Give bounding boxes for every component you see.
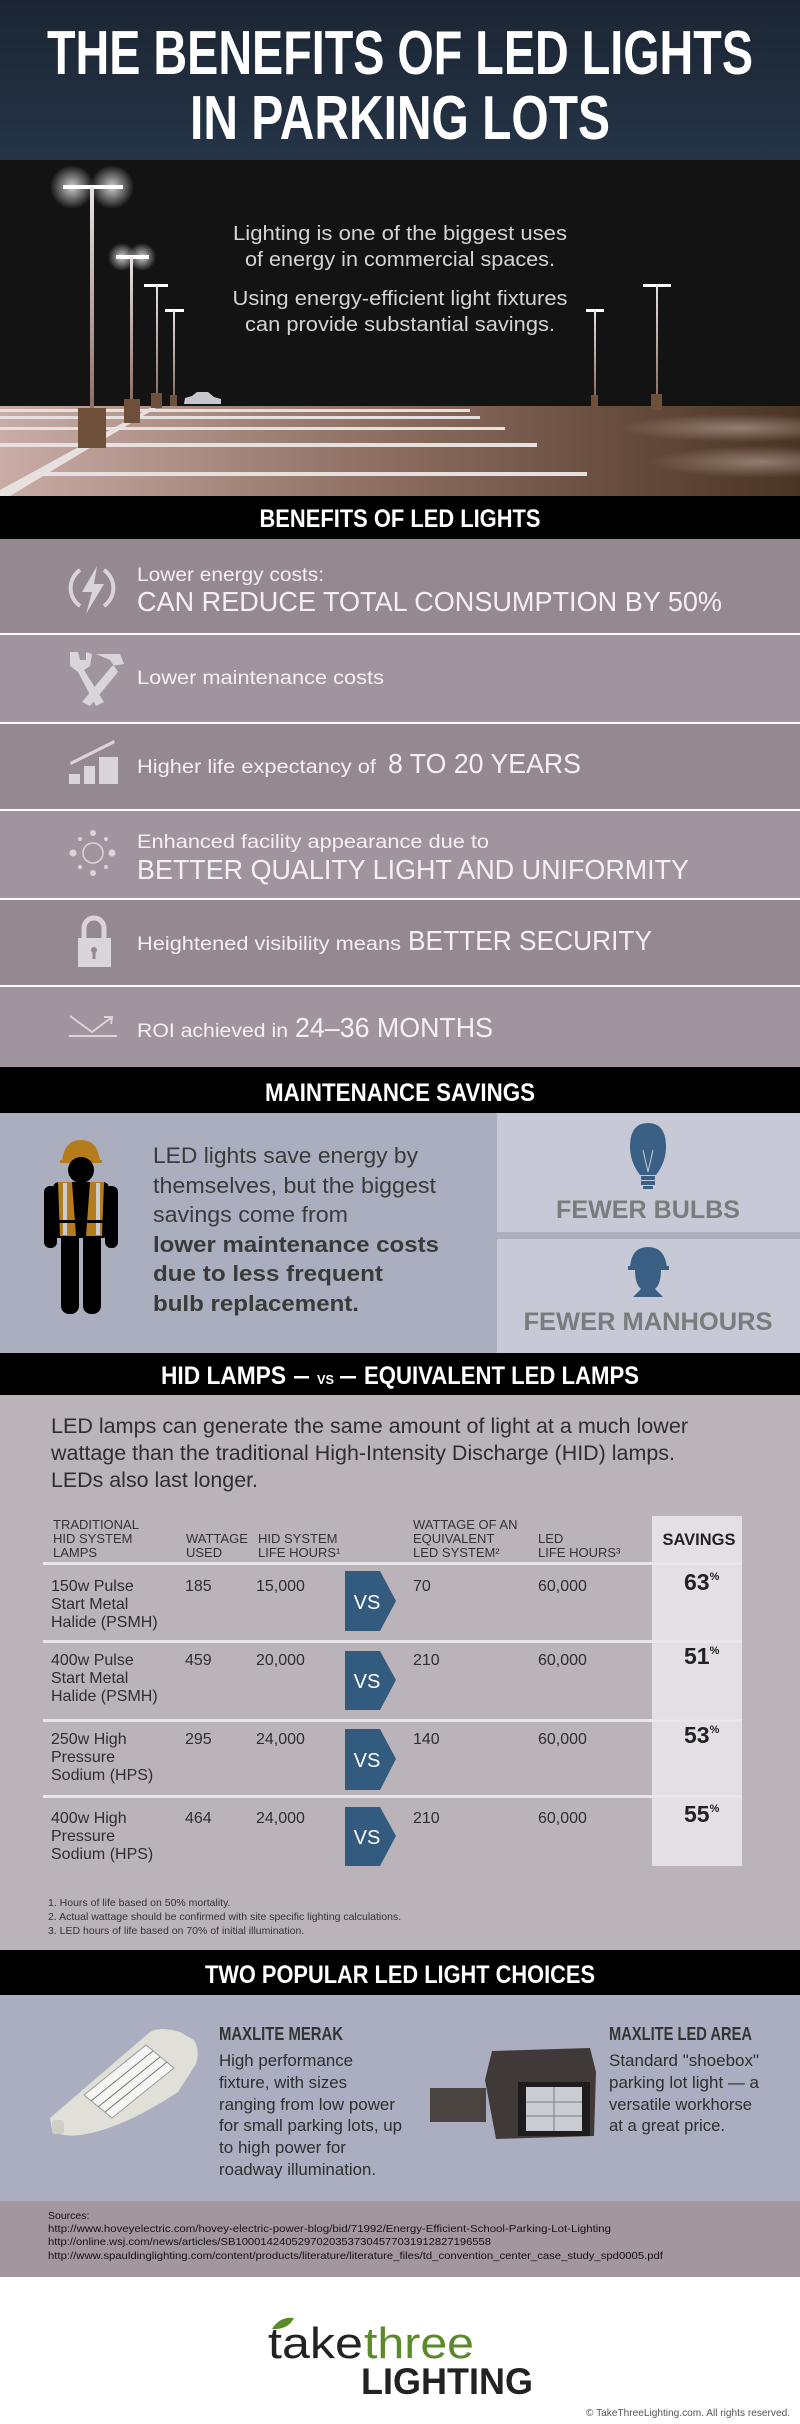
heading: maintenance savings [0, 1067, 800, 1113]
table rows: 60,000 [538, 1731, 587, 1748]
heading: HID vs LED: VS [317, 1372, 334, 1387]
text: Maxlite LED Area [609, 2024, 760, 2135]
table rows: 400w Pulse [51, 1652, 134, 1669]
heading: two popular LED light choices: TWO POPULAR LED LIGHT CHOICES [205, 1961, 595, 1989]
table rows: Halide (PSMH) [51, 1614, 158, 1631]
table rows: Pressure [51, 1828, 115, 1845]
panel: benefits list: BETTER SECURITY [408, 925, 652, 956]
panel: maintenance savings: savings come from [153, 1202, 348, 1227]
savings values: 53 [684, 1722, 710, 1748]
panel: benefits list: 24–36 MONTHS [295, 1012, 493, 1043]
panel: maintenance savings: themselves, but the biggest [153, 1173, 436, 1198]
VS arrows: VS [354, 1671, 380, 1693]
footnotes [48, 1897, 401, 1937]
table rows: 250w High [51, 1731, 127, 1748]
panel: HID vs LED table: wattage than the traditional High-Intensity Discharge (HID) lamps. [50, 1442, 675, 1465]
panel: benefits list: Lower maintenance costs [137, 668, 384, 689]
heading: benefits of LED lights: BENEFITS OF LED LIGHTS [260, 505, 540, 533]
VS arrows [345, 1571, 396, 1866]
sources: http://www.spauldinglighting.com/content/products/literature/literature_files/td_convention_center_case_study_spd0005.pdf [48, 2250, 663, 2262]
heading: HID vs LED: HID LAMPS [161, 1362, 286, 1390]
text: Maxlite Merak: High performance [219, 2051, 353, 2070]
panel: benefits list [0, 539, 800, 1067]
VS arrows: VS [354, 1827, 380, 1849]
table rows: 60,000 [538, 1578, 587, 1595]
icon: ROI arrow [69, 1016, 117, 1036]
table header: SAVINGS [662, 1530, 736, 1549]
footnotes: 3. LED hours of life based on 70% of initial illumination. [48, 1925, 304, 1937]
table rows: 210 [413, 1652, 440, 1669]
VS arrows: VS [354, 1592, 380, 1614]
intro text: Lighting is one of the biggest uses [233, 223, 567, 245]
intro text: of energy in commercial spaces. [245, 249, 555, 271]
sources: http://online.wsj.com/news/articles/SB10001424052970203537304577031912827196558 [48, 2236, 491, 2248]
panel: fewer bulbs: FEWER BULBS [556, 1196, 740, 1224]
table header: WATTAGE [186, 1531, 248, 1546]
intro text: Using energy-efficient light fixtures [232, 288, 568, 310]
panel: HID vs LED table: LED lamps can generate the same amount of light at a much lower [51, 1415, 688, 1438]
heading: HID vs LED [0, 1353, 800, 1395]
table header: WATTAGE OF AN [413, 1517, 517, 1532]
table header: TRADITIONAL [53, 1517, 139, 1532]
title: IN PARKING LOTS [190, 84, 610, 153]
table rows: Pressure [51, 1749, 115, 1766]
text: Maxlite LED Area: Standard "shoebox" [609, 2051, 759, 2070]
copyright: © TakeThreeLighting.com. All rights reserved. [586, 2407, 790, 2419]
table header: LIFE HOURS¹ [258, 1545, 341, 1560]
panel: maintenance savings: due to less frequent [153, 1261, 384, 1286]
icon: sun [70, 830, 116, 876]
table rows: 70 [413, 1578, 431, 1595]
icon: Merak fixture [50, 2029, 198, 2135]
table header [53, 1517, 736, 1560]
table rows: 15,000 [256, 1578, 305, 1595]
table rows: 150w Pulse [51, 1578, 134, 1595]
savings values: % [710, 1645, 720, 1657]
panel: HID vs LED table: LEDs also last longer. [51, 1469, 258, 1492]
icon: lock [78, 918, 111, 967]
icon: energy bolt [71, 566, 113, 614]
table rows: 24,000 [256, 1810, 305, 1827]
panel: LED light choices [0, 1995, 800, 2201]
table rows: 60,000 [538, 1652, 587, 1669]
icon: worker head [628, 1247, 669, 1297]
table rows: Start Metal [51, 1596, 128, 1613]
parking lot scene [0, 160, 800, 496]
icon: bar chart [69, 740, 118, 784]
table rows: 60,000 [538, 1810, 587, 1827]
table header: LIFE HOURS³ [538, 1545, 621, 1560]
intro text [232, 223, 568, 336]
table header: LAMPS [53, 1545, 97, 1560]
table header: LED [538, 1531, 563, 1546]
panel: benefits list: Higher life expectancy of [137, 757, 377, 778]
text: Maxlite LED Area: at a great price. [609, 2116, 725, 2135]
street lamps [50, 165, 671, 448]
panel: benefits list: Lower energy costs: [137, 565, 324, 586]
panel: benefits list: CAN REDUCE TOTAL CONSUMPTION BY 50% [137, 586, 722, 617]
table rows: 140 [413, 1731, 440, 1748]
text: Maxlite LED Area: MAXLITE LED AREA [609, 2024, 752, 2044]
table header: EQUIVALENT [413, 1531, 494, 1546]
icon: tools [70, 652, 124, 706]
savings values: 51 [684, 1643, 710, 1669]
text: Maxlite LED Area: versatile workhorse [609, 2095, 752, 2114]
icon: bulb [630, 1123, 666, 1189]
panel: maintenance savings [0, 1113, 800, 1353]
footnotes: 1. Hours of life based on 50% mortality. [48, 1897, 230, 1909]
logo: takethree lighting [268, 2318, 533, 2402]
car [184, 392, 221, 404]
logo: takethree lighting: three [364, 2319, 474, 2368]
heading: maintenance savings: MAINTENANCE SAVINGS [265, 1079, 535, 1107]
savings values: 63 [684, 1569, 710, 1595]
table header: HID SYSTEM [258, 1531, 337, 1546]
sources: http://www.hoveyelectric.com/hovey-electric-power-blog/bid/71992/Energy-Efficient-School-Parking-Lot-Lighting [48, 2223, 611, 2235]
table header: USED [186, 1545, 222, 1560]
table rows: Sodium (HPS) [51, 1767, 153, 1784]
VS arrows: VS [354, 1750, 380, 1772]
table rows: 24,000 [256, 1731, 305, 1748]
logo: takethree lighting: take [268, 2319, 363, 2368]
table rows: 185 [185, 1578, 212, 1595]
savings values [684, 1569, 720, 1827]
table rows: 295 [185, 1731, 212, 1748]
table rows: 464 [185, 1810, 212, 1827]
text: Maxlite Merak [219, 2024, 402, 2179]
savings values: % [710, 1571, 720, 1583]
table rows: Halide (PSMH) [51, 1688, 158, 1705]
panel: fewer bulbs [497, 1113, 800, 1232]
table header: LED SYSTEM² [413, 1545, 500, 1560]
text: Maxlite Merak: MAXLITE MERAK [219, 2024, 343, 2044]
heading: benefits of LED lights [0, 496, 800, 539]
text: Maxlite Merak: roadway illumination. [219, 2160, 376, 2179]
text: Maxlite Merak: fixture, with sizes [219, 2073, 347, 2092]
table rows: Sodium (HPS) [51, 1846, 153, 1863]
panel: maintenance savings: lower maintenance costs [153, 1232, 439, 1257]
table rows: 459 [185, 1652, 212, 1669]
panel: benefits list: ROI achieved in [137, 1021, 288, 1042]
table rows: 400w High [51, 1810, 127, 1827]
footnotes: 2. Actual wattage should be confirmed with site specific lighting calculations. [48, 1911, 401, 1923]
savings values: % [710, 1724, 720, 1736]
table header: HID SYSTEM [53, 1531, 132, 1546]
savings column [652, 1516, 742, 1866]
icon: shoebox fixture [430, 2048, 596, 2139]
sources [0, 2201, 800, 2277]
intro text: can provide substantial savings. [245, 314, 555, 336]
panel: maintenance savings: LED lights save energy by [153, 1143, 418, 1168]
sources: Sources: [48, 2210, 89, 2222]
savings values: % [710, 1803, 720, 1815]
title [0, 0, 800, 160]
heading: HID vs LED: EQUIVALENT LED LAMPS [364, 1362, 639, 1390]
panel: maintenance savings: bulb replacement. [153, 1291, 359, 1316]
table rows: Start Metal [51, 1670, 128, 1687]
table rows: 20,000 [256, 1652, 305, 1669]
text: Maxlite LED Area: parking lot light — a [609, 2073, 760, 2092]
panel: benefits list: Heightened visibility means [137, 934, 401, 955]
text: Maxlite Merak: to high power for [219, 2138, 346, 2157]
panel: fewer manhours [497, 1239, 800, 1353]
text: Maxlite Merak: ranging from low power [219, 2095, 395, 2114]
panel: benefits list: Enhanced facility appearance due to [137, 832, 489, 853]
icon: worker [44, 1140, 118, 1314]
panel: fewer manhours: FEWER MANHOURS [524, 1308, 772, 1336]
heading: two popular LED light choices [0, 1950, 800, 1995]
panel: benefits list: 8 TO 20 YEARS [388, 748, 581, 779]
text: Maxlite Merak: for small parking lots, up [219, 2116, 402, 2135]
logo: takethree lighting: LIGHTING [361, 2361, 533, 2402]
table rows [51, 1578, 587, 1863]
table rows: 210 [413, 1810, 440, 1827]
panel: HID vs LED table [0, 1395, 800, 1950]
savings values: 55 [684, 1801, 710, 1827]
panel: benefits list: BETTER QUALITY LIGHT AND UNIFORMITY [137, 854, 689, 885]
